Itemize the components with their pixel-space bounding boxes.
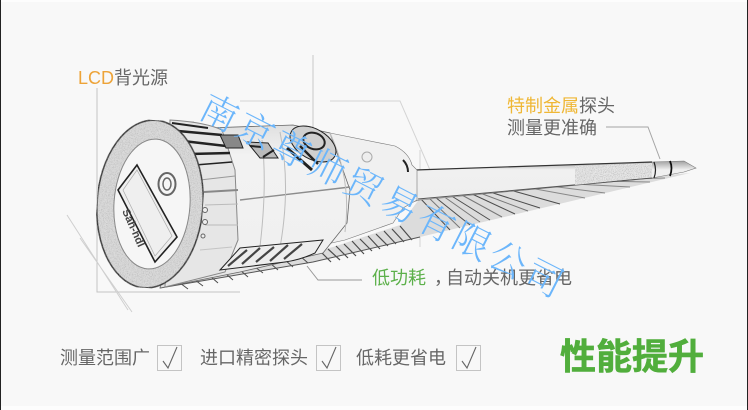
feature: low power: 低耗更省电 xyxy=(356,348,446,368)
label: metal probe: 测量更准确 xyxy=(507,118,597,138)
feature: imported probe: 进口精密探头 xyxy=(200,348,308,368)
heading: performance upgrade: 性能提升 xyxy=(560,336,704,377)
label: low power: 低功耗 ，自动关机更省电 xyxy=(372,268,572,288)
shadow hatching xyxy=(160,173,690,289)
label: metal probe: 特制金属探头 xyxy=(507,96,615,116)
leader line: probe xyxy=(606,127,660,159)
grip ribs xyxy=(165,120,238,287)
feature: imported probe xyxy=(200,346,340,370)
feature: measuring range xyxy=(60,346,182,370)
side window pattern xyxy=(220,240,323,270)
LCD face xyxy=(110,137,194,271)
watermark: 南京尊师贸易有限公司 xyxy=(192,78,577,310)
tapered neck xyxy=(300,130,417,250)
icon: power button xyxy=(158,173,176,195)
feature: measuring range: 测量范围广 xyxy=(60,348,150,368)
side dots xyxy=(201,208,208,238)
leader line: low power xyxy=(307,266,362,280)
probe shaft xyxy=(400,161,696,205)
feature: low power xyxy=(356,346,480,370)
top button cluster xyxy=(220,119,342,170)
bezel xyxy=(91,117,209,291)
label: LCD backlight: LCD背光源 xyxy=(78,68,168,88)
label: metal probe xyxy=(507,96,615,138)
brand name: Sah-hdl xyxy=(119,207,147,249)
device illustration xyxy=(91,117,696,291)
LCD screen xyxy=(118,165,177,262)
main body xyxy=(160,122,350,288)
